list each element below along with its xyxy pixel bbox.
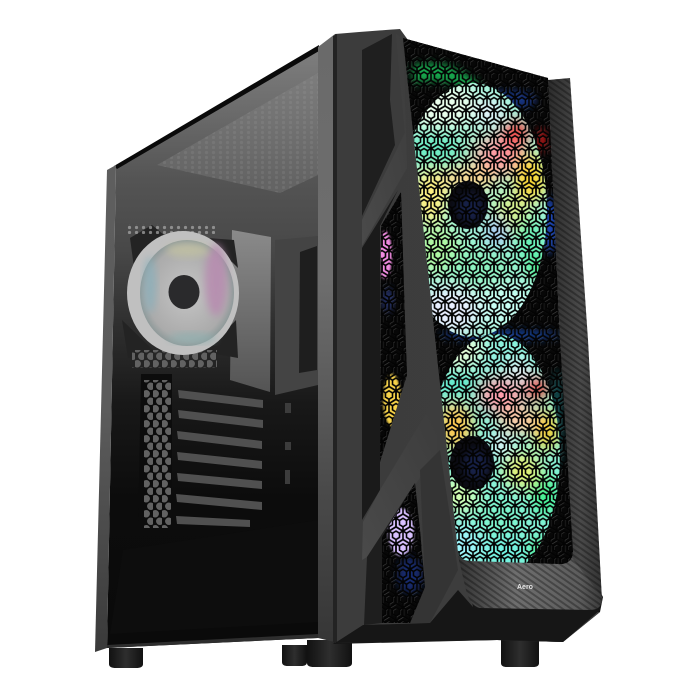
rear RGB fan [127,231,239,355]
right side of frame lower [410,450,458,623]
bottom black lip [335,590,600,643]
front pillar [333,29,600,643]
right frame strip beside glass [318,34,335,642]
rear panel ports [285,403,291,484]
front mesh with RGB fans [400,30,580,580]
side mesh window lower [382,483,425,623]
expansion slots [176,390,263,527]
ambient light on mesh [412,63,562,470]
bottom fan hub [450,436,494,490]
bracket dark slot [299,246,317,373]
bottom front plate with logo [458,556,602,610]
bottom glass edge [107,634,318,648]
backing of the front lower corner [333,540,603,644]
power supply shroud plate [230,230,271,392]
lower recess [364,483,415,625]
side mesh window upper [380,192,407,462]
side panel: tempered glass [95,34,335,652]
rear fan frame corners [122,225,238,358]
top fan hub [448,181,488,229]
top black seam of glass [114,45,319,169]
bottom fan glow [440,334,560,563]
bottom compartment [110,520,318,634]
rear bracket [275,236,318,395]
mesh overlay [400,30,580,570]
upper diagonal band [362,34,407,246]
top fan glow [413,83,547,337]
lower diagonal band [362,407,437,560]
feet [109,638,539,668]
brand logo: Aero [517,584,533,591]
rear perforated vertical strip [138,374,172,532]
interior top perforated panel [157,73,318,193]
rear fan perforation [125,224,217,368]
left frame strip [95,165,116,652]
product photo: PC tower case [95,29,603,668]
upper recess [362,34,395,216]
carbon fibre side strip [548,78,602,600]
middle recess [362,190,398,520]
